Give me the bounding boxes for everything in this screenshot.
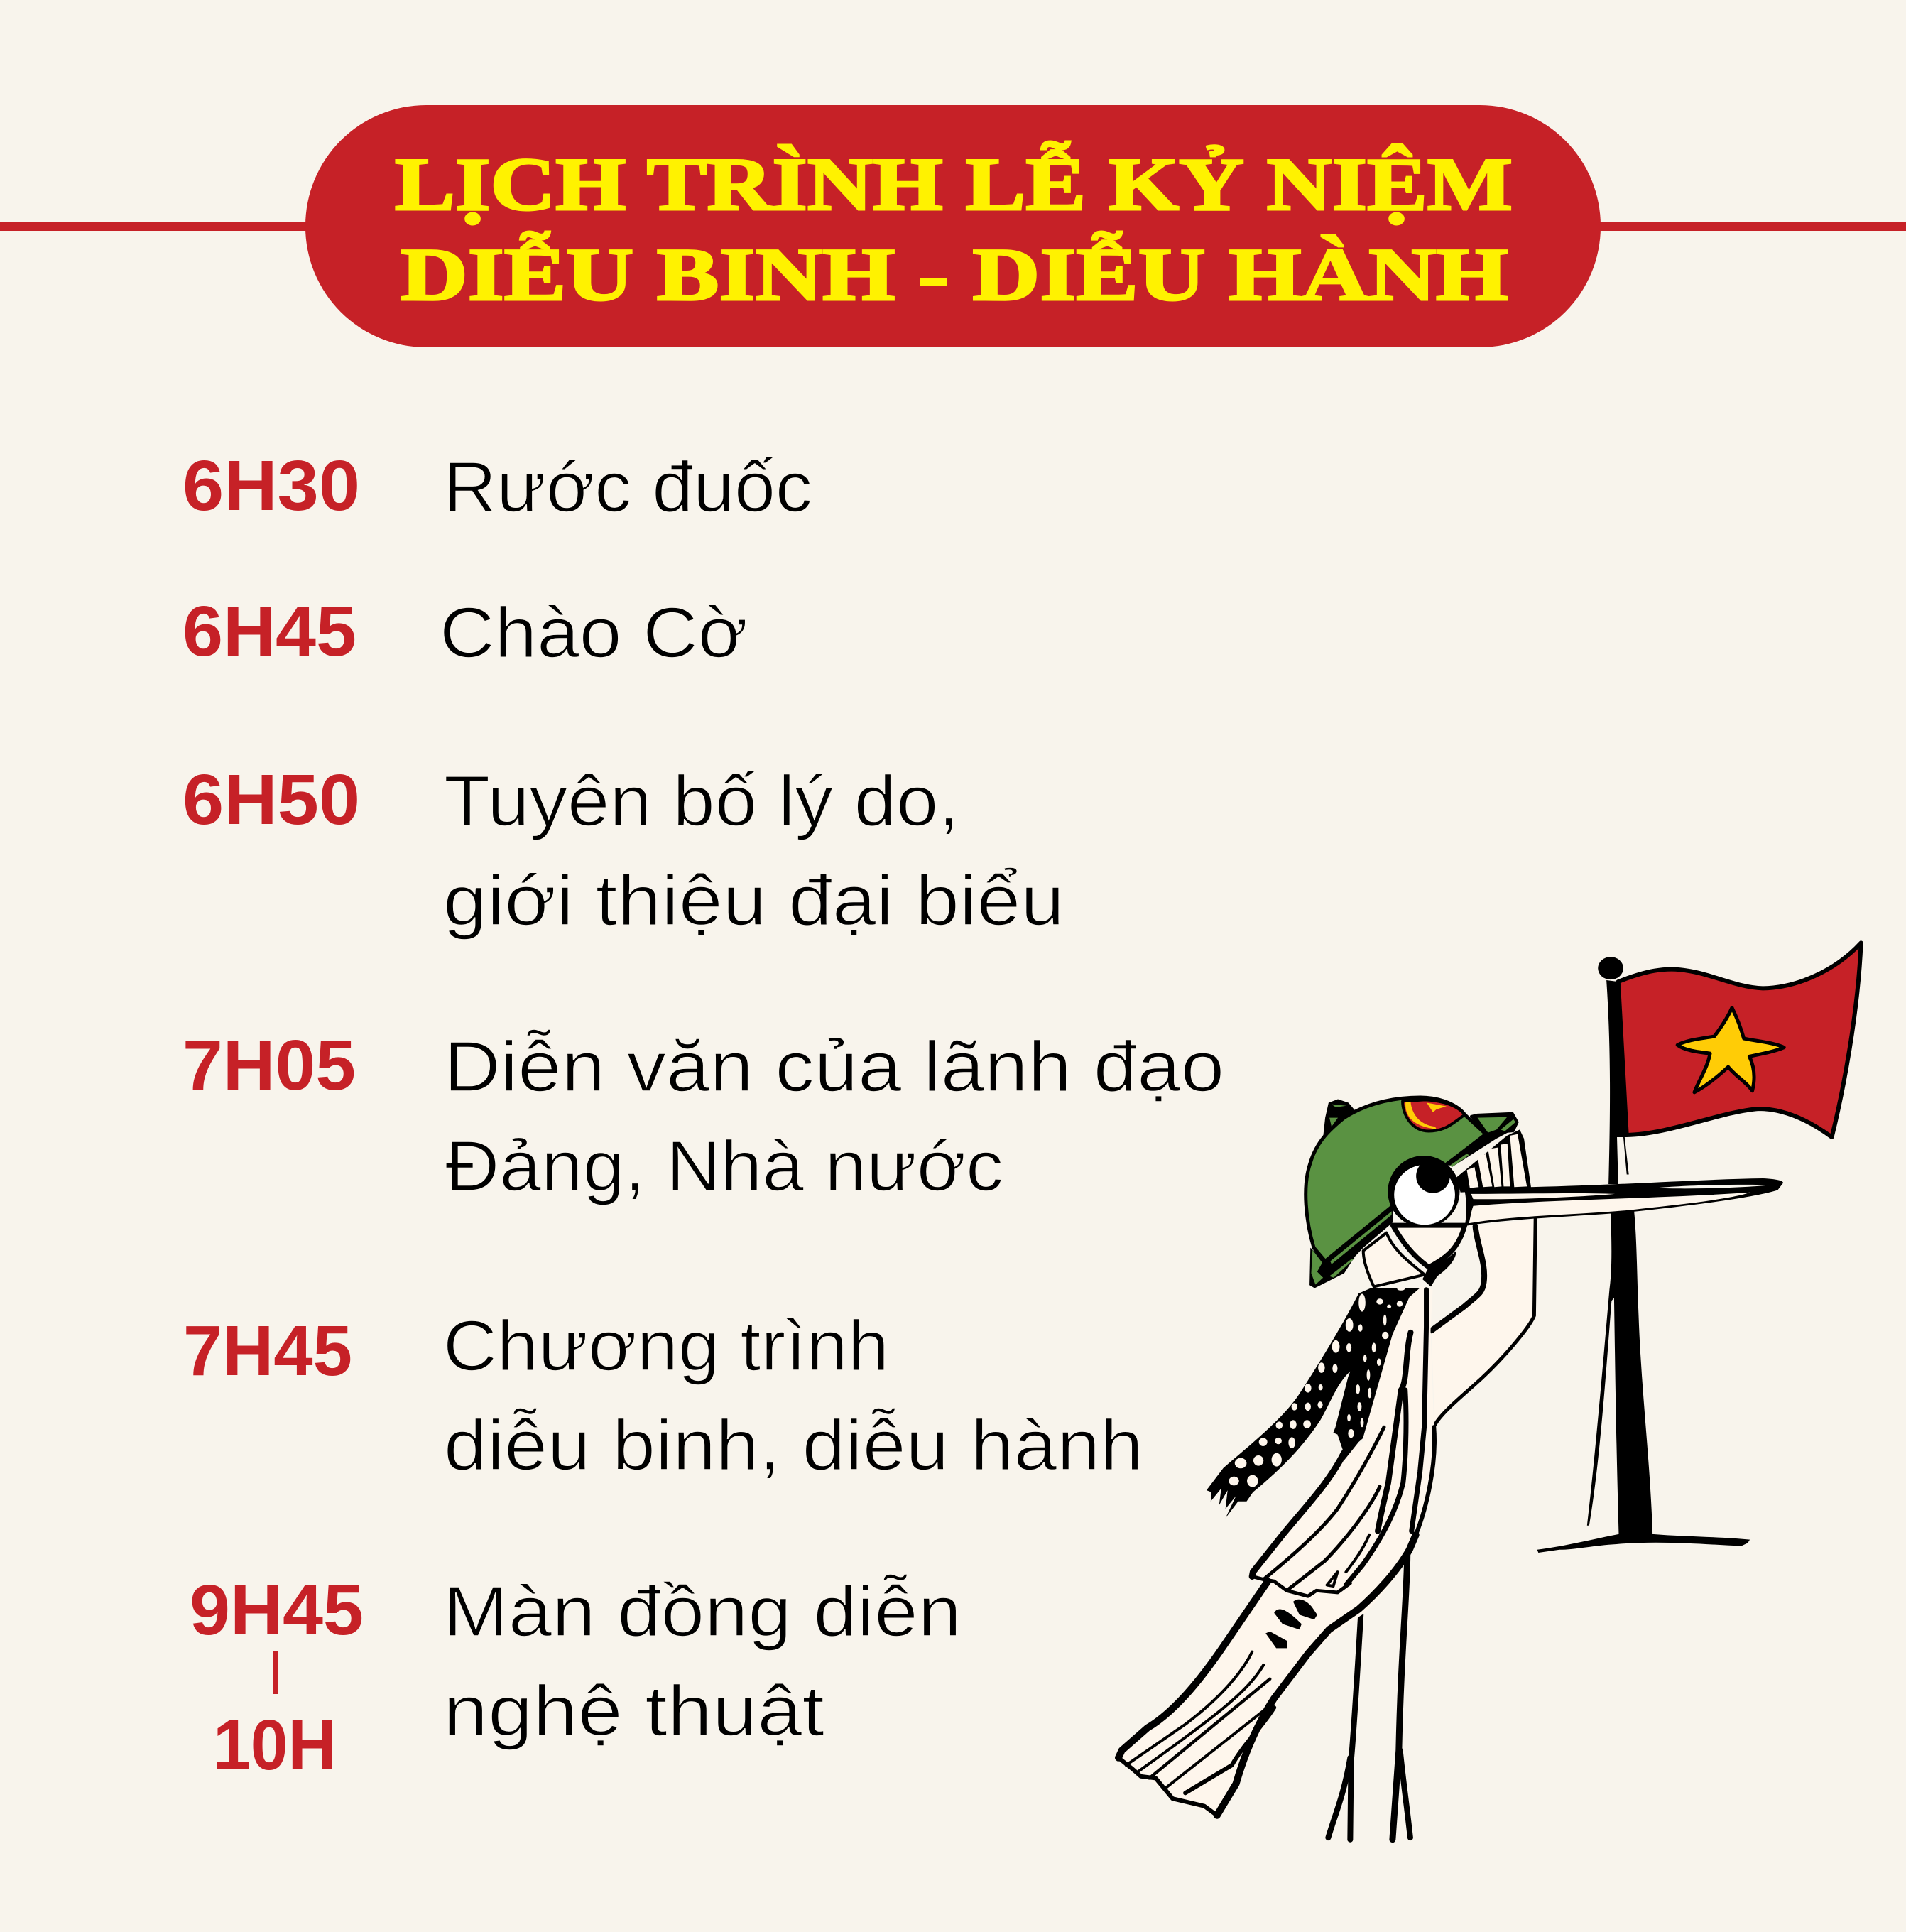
- schedule row: 9H45 to 10H: 10H: [213, 1705, 337, 1785]
- title line 2: DIỄU BINH - DIỄU HÀNH: [401, 232, 1508, 316]
- jacket and trousers: [1118, 1286, 1434, 1816]
- schedule row: 9H45 to 10H: nghệ thuật: [443, 1671, 824, 1751]
- eye: [1388, 1156, 1459, 1227]
- helmet: [1306, 1097, 1518, 1288]
- title line 1: LỊCH TRÌNH LỄ KỶ NIỆM: [395, 141, 1513, 226]
- schedule row: 6H50: giới thiệu đại biểu: [443, 861, 1064, 940]
- dotted scarf: [1207, 1288, 1420, 1518]
- flag with star: [1598, 943, 1861, 1184]
- schedule row: 7H05: Đảng, Nhà nước: [445, 1127, 1003, 1206]
- schedule row: 6H30: 6H30: [183, 446, 360, 526]
- schedule row: 6H50: Tuyên bố lý do,: [444, 761, 959, 841]
- schedule row: 7H45: Chương trình: [443, 1306, 889, 1386]
- schedule row: 6H45: 6H45: [183, 592, 356, 671]
- soldier body: [1118, 1219, 1535, 1840]
- schedule row: 7H45: [183, 1306, 1143, 1485]
- schedule row: 7H45: diễu binh, diễu hành: [444, 1406, 1143, 1485]
- back legs: [1328, 1551, 1410, 1840]
- long nose: [1465, 1178, 1783, 1226]
- header banner: [0, 105, 1906, 347]
- schedule row: 6H30: Rước đuốc: [443, 447, 812, 527]
- schedule row: 9H45 to 10H: Màn đồng diễn: [443, 1572, 962, 1651]
- schedule row: 7H05: Diễn văn của lãnh đạo: [444, 1027, 1224, 1107]
- schedule row: 6H50: 6H50: [183, 760, 360, 840]
- illustration: soldier saluting flag: [1118, 943, 1861, 1840]
- schedule row: 7H05: [183, 1026, 1224, 1206]
- schedule row: 6H30: [183, 446, 812, 527]
- schedule row: 6H45: Chào Cờ: [440, 593, 748, 673]
- flagpole base and lower pole: [1537, 1210, 1750, 1553]
- schedule row: 7H45: 7H45: [183, 1311, 352, 1391]
- schedule row: 7H05: 7H05: [183, 1026, 356, 1105]
- schedule row: 9H45 to 10H: [190, 1570, 962, 1785]
- schedule row: 6H50: [183, 760, 1064, 940]
- soldier head, helmet and nose: [1306, 1097, 1783, 1288]
- schedule row: 6H45: [183, 592, 748, 673]
- hand fingers: [1456, 1129, 1531, 1193]
- schedule row: 9H45 to 10H: 9H45: [190, 1570, 364, 1650]
- raised arm: [1432, 1219, 1535, 1426]
- neck and chin: [1363, 1225, 1465, 1286]
